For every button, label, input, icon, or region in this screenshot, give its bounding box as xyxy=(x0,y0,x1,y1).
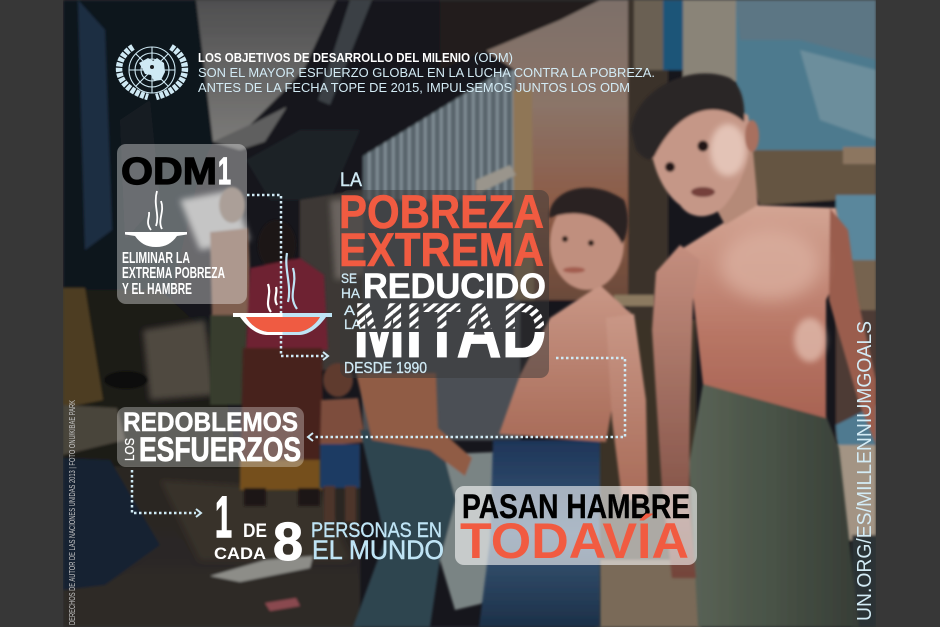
panel: main headline xyxy=(339,170,549,378)
panel: still hungry xyxy=(455,486,697,569)
icon: large steaming bowl xyxy=(233,253,332,335)
ODM heading: ODM xyxy=(121,151,217,193)
statistic: 1 of 8 people: 1 xyxy=(215,485,232,550)
statistic: 1 of 8 people: EL MUNDO xyxy=(312,535,444,565)
copyright vertical text: DERECHOS DE AUTOR DE LAS NACIONES UNIDAS 2013 | FOTO ONU/KIBAE PARK xyxy=(68,400,77,625)
text: PASAN HAMBRE: PASAN HAMBRE xyxy=(462,488,690,526)
header bold line: LOS OBJETIVOS DE DESARROLLO DEL MILENIO xyxy=(198,50,470,65)
goal description: Y EL HAMBRE xyxy=(122,281,192,298)
globe with meridians xyxy=(129,47,175,93)
text: LOS rotated: LOS xyxy=(122,438,137,461)
headline: REDUCIDO: REDUCIDO xyxy=(363,267,546,306)
woman in red shirt xyxy=(240,220,328,506)
header abbreviation: (ODM) xyxy=(474,50,513,65)
goal description: EXTREMA POBREZA xyxy=(122,265,225,282)
dotted connector: call to action to statistic xyxy=(132,470,201,517)
dotted connector: headline to call to action xyxy=(308,358,625,441)
statistic: 1 of 8 people xyxy=(214,485,444,572)
panel: ODM 1 xyxy=(117,144,247,304)
statistic: 1 of 8 people: CADA xyxy=(214,544,266,563)
UN emblem xyxy=(119,47,185,97)
headline: POBREZA: POBREZA xyxy=(339,185,544,238)
small words: se ha: A xyxy=(344,302,356,318)
statistic: 1 of 8 people: PERSONAS EN xyxy=(311,519,442,542)
text: TODAVIA: TODAVÍA xyxy=(460,513,689,569)
statistic: 1 of 8 people: 8 xyxy=(273,512,303,572)
headline: EXTREMA: EXTREMA xyxy=(339,223,544,276)
header line two: SON EL MAYOR ESFUERZO GLOBAL EN LA LUCHA CONTRA LA POBREZA. xyxy=(198,65,655,80)
small child xyxy=(320,363,366,522)
boy with bucket xyxy=(353,373,497,627)
small words: se ha: HA xyxy=(341,285,361,301)
middle boy xyxy=(479,188,648,627)
text: ESFUERZOS: ESFUERZOS xyxy=(139,431,301,469)
goal description: ELIMINAR LA xyxy=(122,250,190,267)
headline: LA: LA xyxy=(340,170,362,191)
dotted connector: ODM panel to headline xyxy=(247,195,328,360)
panel: call to action xyxy=(117,407,304,469)
statistic: 1 of 8 people: DE xyxy=(243,521,267,542)
header line three: ANTES DE LA FECHA TOPE DE 2015, IMPULSEMOS JUNTOS LOS ODM xyxy=(198,80,630,95)
headline: since 1990: DESDE 1990 xyxy=(344,360,427,377)
header text xyxy=(198,50,655,95)
text: REDOBLEMOS: REDOBLEMOS xyxy=(123,407,298,437)
man in background xyxy=(180,187,252,405)
headline: MITAD split: MITAD xyxy=(353,286,547,374)
small words: se ha: SE xyxy=(341,270,357,286)
goal description xyxy=(122,250,225,298)
tall boy on the right xyxy=(631,73,876,627)
olive wreath xyxy=(119,47,185,97)
website vertical text: UN.ORG/ES/MILLENNIUMGOALS xyxy=(854,321,876,621)
small words: se ha: LA xyxy=(344,316,362,332)
headline: MITAD split: MITAD xyxy=(353,286,547,374)
number one: 1 xyxy=(218,151,231,193)
small words: se ha xyxy=(341,270,362,332)
icon: steaming bowl xyxy=(125,191,187,247)
headline: MITAD split xyxy=(356,303,544,358)
